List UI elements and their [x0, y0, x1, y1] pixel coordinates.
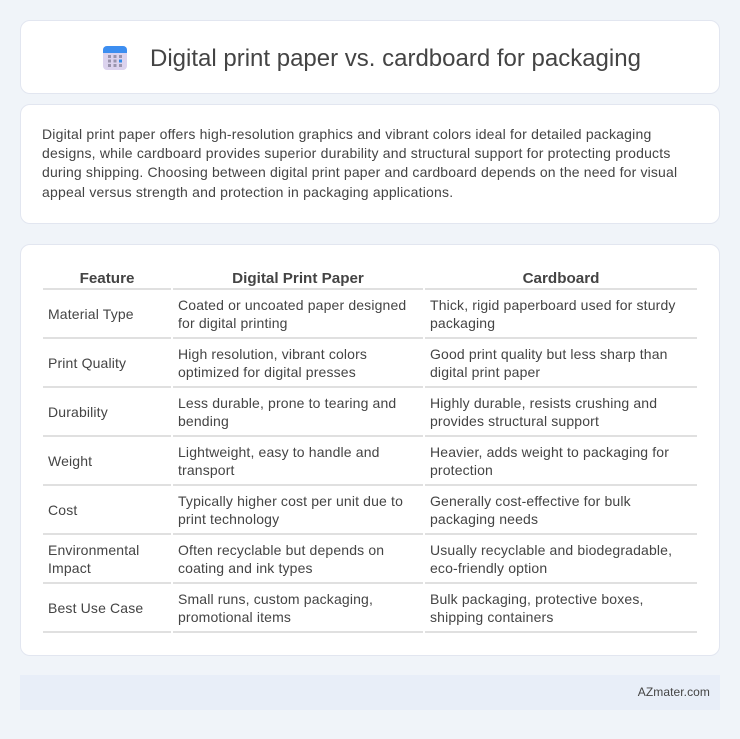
title: Digital print paper vs. cardboard for packaging	[150, 45, 641, 72]
intro text: appeal versus strength and protection in packaging applications.	[42, 184, 453, 200]
intro text: Digital print paper offers high-resolution graphics and vibrant colors ideal for detailed packaging	[42, 126, 651, 142]
row: Durability: provides structural support	[430, 413, 599, 429]
row: Weight: Weight	[48, 453, 92, 469]
column header: Cardboard: Cardboard	[523, 270, 599, 287]
row: Cost: Generally cost-effective for bulk	[430, 493, 631, 509]
column header: Digital Print Paper: Digital Print Paper	[232, 270, 364, 287]
row: Print Quality: Good print quality but less sharp than	[430, 346, 668, 362]
row: Durability: Less durable, prone to tearing and	[178, 395, 396, 411]
footer credit: AZmater.com	[638, 685, 710, 699]
row: Durability: Durability	[48, 404, 108, 420]
row: Durability: bending	[178, 413, 229, 429]
panel: introduction	[20, 104, 720, 224]
panel: title header	[20, 20, 720, 94]
row: Best Use Case: Small runs, custom packaging,	[178, 591, 373, 607]
row: Environmental Impact: Impact	[48, 560, 91, 576]
row: Environmental Impact: eco-friendly option	[430, 560, 547, 576]
row: Cost: packaging needs	[430, 511, 538, 527]
row: Durability	[43, 386, 697, 429]
row: Print Quality: digital print paper	[430, 364, 540, 380]
table header row	[80, 270, 599, 287]
row: Weight: transport	[178, 462, 235, 478]
intro text: during shipping. Choosing between digital print paper and cardboard depends on the need for visual	[42, 164, 677, 180]
row: Best Use Case	[43, 582, 697, 633]
row: Print Quality	[43, 337, 697, 380]
row: Material Type: Thick, rigid paperboard used for sturdy	[430, 297, 676, 313]
row: Cost: Cost	[48, 502, 77, 518]
column header: Feature: Feature	[80, 270, 134, 287]
row: Print Quality: Print Quality	[48, 355, 126, 371]
row: Weight: protection	[430, 462, 493, 478]
row: Environmental Impact: Usually recyclable and biodegradable,	[430, 542, 672, 558]
row: Weight	[43, 435, 697, 478]
footer bar	[20, 675, 720, 710]
intro text	[42, 126, 677, 200]
row: Best Use Case: Best Use Case	[48, 600, 143, 616]
row: Material Type: packaging	[430, 315, 495, 331]
row: Material Type: for digital printing	[178, 315, 288, 331]
panel: comparison table	[20, 244, 720, 656]
intro text: designs, while cardboard provides superior durability and structural support for protecting products	[42, 145, 671, 161]
row: Print Quality: High resolution, vibrant colors	[178, 346, 367, 362]
row: Environmental Impact	[43, 533, 697, 576]
row: Durability: Highly durable, resists crushing and	[430, 395, 657, 411]
row: Print Quality: optimized for digital presses	[178, 364, 356, 380]
row: Cost: Typically higher cost per unit due to	[178, 493, 403, 509]
row: Weight: Lightweight, easy to handle and	[178, 444, 380, 460]
row: Material Type: Material Type	[48, 306, 134, 322]
row: Environmental Impact: Environmental	[48, 542, 139, 558]
row: Environmental Impact: Often recyclable but depends on	[178, 542, 384, 558]
row: Material Type: Coated or uncoated paper designed	[178, 297, 406, 313]
row: Best Use Case: shipping containers	[430, 609, 553, 625]
row: Cost	[43, 484, 697, 527]
icon: calendar	[103, 46, 127, 70]
row: Weight: Heavier, adds weight to packaging for	[430, 444, 669, 460]
row: Material Type	[43, 288, 697, 331]
row: Environmental Impact: coating and ink types	[178, 560, 313, 576]
row: Cost: print technology	[178, 511, 279, 527]
row: Best Use Case: promotional items	[178, 609, 291, 625]
row: Best Use Case: Bulk packaging, protective boxes,	[430, 591, 644, 607]
